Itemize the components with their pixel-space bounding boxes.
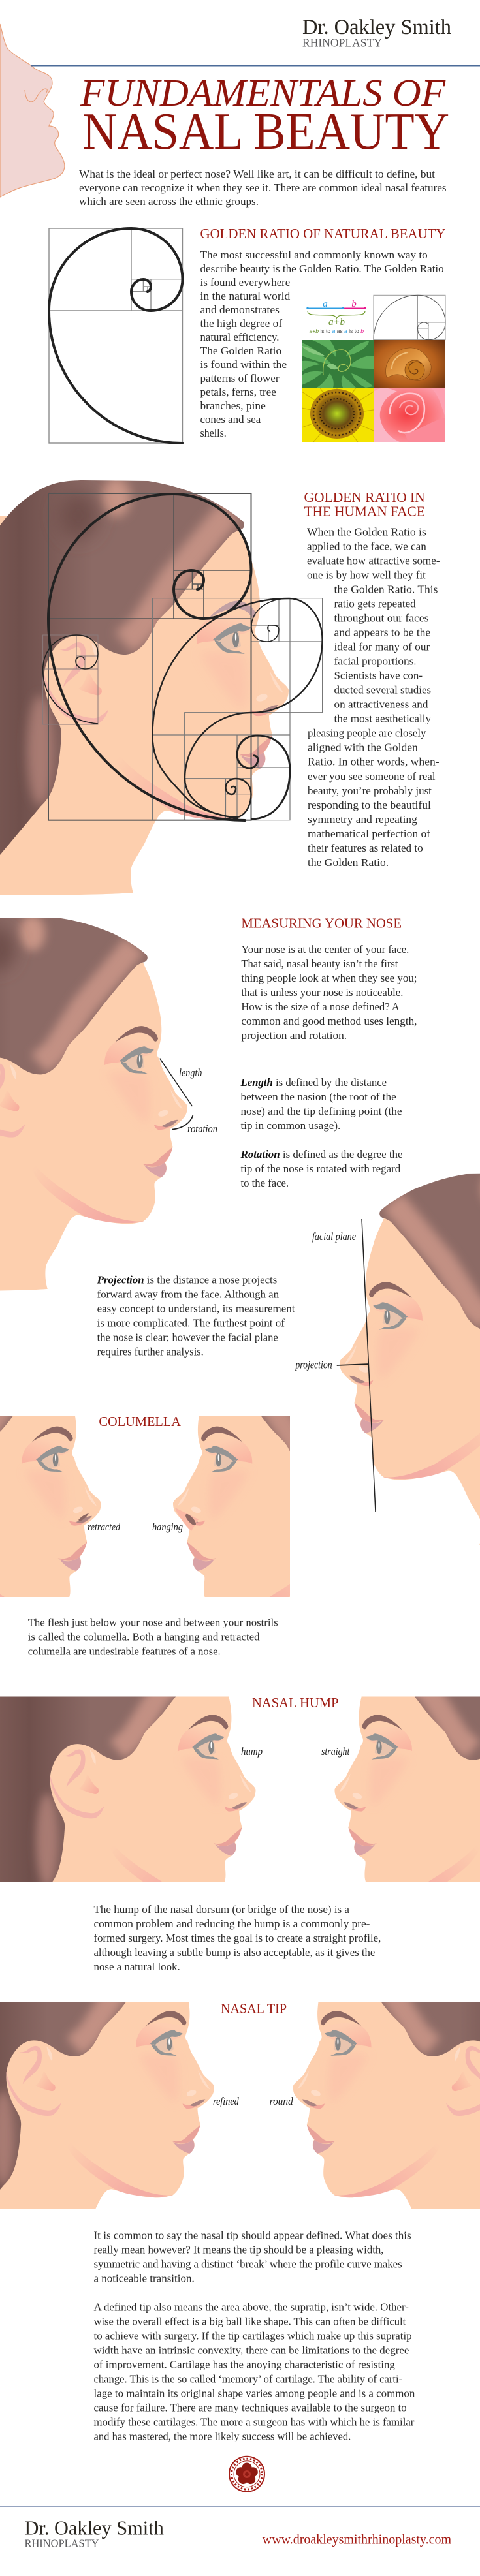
logo: Dr. Oakley Smith: Dr. Oakley Smith <box>25 2516 164 2539</box>
text block: When the Golden Ratio is <box>307 526 426 538</box>
text block: How is the size of a nose defined? A <box>241 1001 400 1013</box>
labels <box>88 1521 183 1533</box>
length definition: tip in common usage). <box>240 1119 340 1132</box>
main head spiral <box>48 494 251 820</box>
text block: that is unless your nose is noticeable. <box>241 986 403 999</box>
text block: the Golden Ratio. This <box>334 583 438 596</box>
text block: The most successful and commonly known way to <box>200 249 428 261</box>
labels: retracted <box>88 1521 121 1533</box>
panel: golden ratio in the human face <box>304 489 440 869</box>
ear spiral <box>43 635 98 724</box>
text block: evaluate how attractive some- <box>307 555 440 567</box>
intro text: What is the ideal or perfect nose? Well like art, it can be difficult to define, but <box>79 168 435 180</box>
panel: nasal tip <box>0 2002 480 2442</box>
image: leaves <box>302 340 374 388</box>
length definition <box>240 1076 402 1132</box>
text block: nose a natural look. <box>94 1961 180 1973</box>
length definition: between the nasion (the root of the <box>240 1091 396 1103</box>
diagram: a and b ratio <box>306 299 366 334</box>
labels: straight <box>321 1745 350 1758</box>
golden ratio grid lines <box>43 493 323 820</box>
text block <box>94 1903 381 1973</box>
text block: their features as related to <box>308 842 423 854</box>
text block: the high degree of <box>200 317 282 330</box>
text block <box>307 526 440 869</box>
logo: Dr. Oakley Smith <box>25 2516 164 2550</box>
text block <box>200 249 444 439</box>
rotation arc <box>172 1115 193 1130</box>
intro text <box>79 168 447 208</box>
text block: really mean however? It means the tip should be a pleasing width, <box>94 2244 384 2256</box>
heading: COLUMELLA <box>99 1414 182 1429</box>
labels: round <box>270 2095 293 2107</box>
text block <box>94 2229 411 2285</box>
text block: the Golden Ratio. <box>308 856 389 869</box>
labels: length <box>179 1066 202 1079</box>
illustration: measuring face with length and rotation <box>0 915 202 1425</box>
text block: aligned with the Golden <box>308 741 418 754</box>
text block: in the natural world <box>200 290 291 302</box>
text block: natural efficiency. <box>200 331 280 343</box>
diagram: a and b ratio: a <box>323 299 328 309</box>
labels: refined <box>213 2095 239 2107</box>
diagram: a and b ratio: a+b is to a as a is to b <box>310 328 364 334</box>
text block: describe beauty is the Golden Ratio. The Golden Ratio <box>200 262 444 275</box>
text block: Scientists have con- <box>334 670 423 682</box>
text block: wise the overall effect is a big ball like shape. This can often be difficult <box>94 2316 406 2328</box>
text block: petals, ferns, tree <box>200 386 276 398</box>
footer <box>25 2516 451 2550</box>
text block: symmetric and having a distinct ‘break’ where the profile curve makes <box>94 2258 402 2271</box>
logo: Dr. Oakley Smith: RHINOPLASTY <box>25 2537 99 2550</box>
facial plane line <box>362 1219 376 1512</box>
website url: www.droakleysmithrhinoplasty.com <box>263 2532 451 2547</box>
text block: thing people look at when they see you; <box>241 972 417 984</box>
text block: The Golden Ratio <box>200 345 281 357</box>
diagram: small golden spiral <box>374 295 445 340</box>
length line <box>160 1059 192 1106</box>
text block: the most aesthetically <box>334 713 432 725</box>
logo: Dr. Oakley Smith <box>302 16 451 50</box>
rotation definition: to the face. <box>240 1177 289 1189</box>
text block: pleasing people are closely <box>308 727 426 739</box>
text block: lage to maintain its original shape varies among people and is a common <box>94 2387 415 2400</box>
text block <box>94 2301 415 2443</box>
intro text: everyone can recognize it when they see it. There are common ideal nasal features <box>79 181 447 194</box>
labels: facial plane and projection <box>295 1230 356 1371</box>
text block: is called the columella. Both a hanging and retracted <box>28 1631 260 1643</box>
projection definition: requires further analysis. <box>97 1346 204 1358</box>
text block: That said, nasal beauty isn’t the first <box>241 957 398 970</box>
text block: ideal for many of our <box>334 641 430 653</box>
rotation definition: Rotation is defined as the degree the <box>240 1148 402 1160</box>
projection definition: Projection is the distance a nose projects <box>97 1274 277 1286</box>
text block: The flesh just below your nose and between your nostrils <box>28 1617 278 1629</box>
illustration: face with golden spiral overlays <box>0 478 323 1044</box>
title: FUNDAMENTALS OF <box>80 71 446 114</box>
text block: Your nose is at the center of your face. <box>241 943 409 955</box>
heading: NASAL TIP <box>221 2000 287 2016</box>
intro text: which are seen across the ethnic groups. <box>79 195 259 208</box>
text block: a noticeable transition. <box>94 2273 195 2285</box>
text block: projection and rotation. <box>241 1029 347 1042</box>
heading: THE HUMAN FACE <box>304 504 425 520</box>
text block: patterns of flower <box>200 372 280 384</box>
text block: columella are undesirable features of a nose. <box>28 1645 221 1658</box>
text block: modify these cartilages. The more a surgeon has with which he is familar <box>94 2416 415 2429</box>
text block: symmetry and repeating <box>308 813 417 826</box>
chart: golden spiral diagram <box>49 228 183 443</box>
illustration: hump face <box>0 1697 256 1882</box>
panel: nasal hump <box>0 1697 480 1970</box>
rotation definition <box>240 1148 402 1189</box>
text block: Ratio. In other words, when- <box>308 756 440 768</box>
text block: ever you see someone of real <box>308 770 436 783</box>
panel: golden ratio of natural beauty <box>200 226 445 439</box>
labels <box>241 1745 350 1758</box>
logo: Dr. Oakley Smith: RHINOPLASTY <box>302 37 382 50</box>
illustration: face profile outline <box>0 24 65 197</box>
text block: although leaving a subtle bump is also acceptable, as it gives the <box>94 1946 375 1959</box>
panel: measuring your nose <box>240 916 417 1189</box>
diagram: a and b ratio: a+b <box>328 317 345 328</box>
eye spiral <box>251 598 289 642</box>
text block: formed surgery. Most times the goal is to create a straight profile, <box>94 1932 381 1944</box>
title <box>80 71 449 161</box>
text block: is found everywhere <box>200 276 290 288</box>
labels: hump <box>241 1745 263 1758</box>
text block: applied to the face, we can <box>307 540 426 553</box>
text block: The hump of the nasal dorsum (or bridge of the nose) is a <box>94 1903 349 1916</box>
projection line <box>337 1364 369 1365</box>
label: rotation: rotation <box>187 1123 217 1135</box>
text block: A defined tip also means the area above, the supratip, isn’t wide. Other- <box>94 2301 409 2314</box>
text block: is found within the <box>200 358 287 371</box>
text block: width have an intrinsic convexity, there can be limitations to the degree <box>94 2344 409 2357</box>
illustration: retracted columella face <box>0 1416 101 1597</box>
text block: cause for failure. There are many techniques available to the surgeon to <box>94 2402 407 2414</box>
text block: throughout our faces <box>334 612 428 625</box>
labels: facial plane and projection: projection <box>295 1359 332 1371</box>
projection definition: is more complicated. The furthest point of <box>97 1317 285 1329</box>
illustration: straight face <box>334 1697 480 1882</box>
image: rose <box>374 388 445 442</box>
diagram: a and b ratio: b <box>351 299 357 309</box>
labels <box>213 2095 293 2107</box>
lip spiral <box>237 736 290 819</box>
heading: MEASURING YOUR NOSE <box>241 916 402 931</box>
length definition: nose) and the tip defining point (the <box>240 1105 402 1117</box>
text block: and has mastered, the more likely success will be achieved. <box>94 2430 351 2443</box>
text block: It is common to say the nasal tip should appear defined. What does this <box>94 2229 411 2242</box>
projection definition: easy concept to understand, its measurement <box>97 1303 295 1315</box>
text block: and demonstrates <box>200 303 280 316</box>
panel: columella <box>0 1416 290 1655</box>
illustration: refined tip face <box>0 2002 214 2209</box>
heading: GOLDEN RATIO IN <box>304 489 425 505</box>
projection definition <box>97 1274 295 1358</box>
nose spiral <box>152 598 323 819</box>
text block: to achieve with surgery. If the tip cartilages which make up this supratip <box>94 2330 412 2342</box>
text block: ratio gets repeated <box>334 598 416 610</box>
text block: facial proportions. <box>334 655 417 668</box>
rotation definition: tip of the nose is rotated with regard <box>240 1162 401 1175</box>
icon: rose seal <box>229 2457 264 2492</box>
illustration: round tip face <box>293 2002 480 2209</box>
text block: beauty, you’re probably just <box>308 784 432 797</box>
heading: NASAL HUMP <box>252 1695 338 1711</box>
length definition: Length is defined by the distance <box>240 1076 387 1089</box>
text block <box>28 1617 278 1658</box>
text block: common problem and reducing the hump is a commonly pre- <box>94 1917 370 1930</box>
labels: hanging <box>152 1521 183 1533</box>
text block <box>241 943 417 1042</box>
image: sunflower <box>302 388 374 442</box>
text block: branches, pine <box>200 399 266 412</box>
text block: common and good method uses length, <box>241 1015 417 1027</box>
labels: facial plane and projection: facial plane <box>312 1230 356 1243</box>
image: nautilus shell <box>374 340 445 388</box>
text block: ducted several studies <box>334 684 431 696</box>
text block: on attractiveness and <box>334 698 428 711</box>
header <box>0 16 480 197</box>
text block: responding to the beautiful <box>308 799 431 811</box>
heading: GOLDEN RATIO OF NATURAL BEAUTY <box>200 226 445 241</box>
text block: of improvement. Cartilage has the anoying characteristic of resisting <box>94 2359 395 2371</box>
text block: change. This is the so called ‘memory’ of cartilage. The ability of carti- <box>94 2373 402 2385</box>
illustration: hanging columella face <box>173 1416 290 1597</box>
projection definition: the nose is clear; however the facial plane <box>97 1331 278 1344</box>
heading <box>304 489 425 520</box>
logo: Dr. Oakley Smith: Dr. Oakley Smith <box>302 16 451 39</box>
text block: shells. <box>200 427 227 439</box>
text block: mathematical perfection of <box>308 828 430 840</box>
text block: one is by how well they fit <box>307 569 426 582</box>
text block: cones and sea <box>200 413 261 426</box>
text block: and appears to be the <box>334 627 430 639</box>
illustration: projection face with facial plane <box>337 1171 480 1681</box>
title: NASAL BEAUTY <box>82 103 449 161</box>
projection definition: forward away from the face. Although an <box>97 1288 280 1301</box>
